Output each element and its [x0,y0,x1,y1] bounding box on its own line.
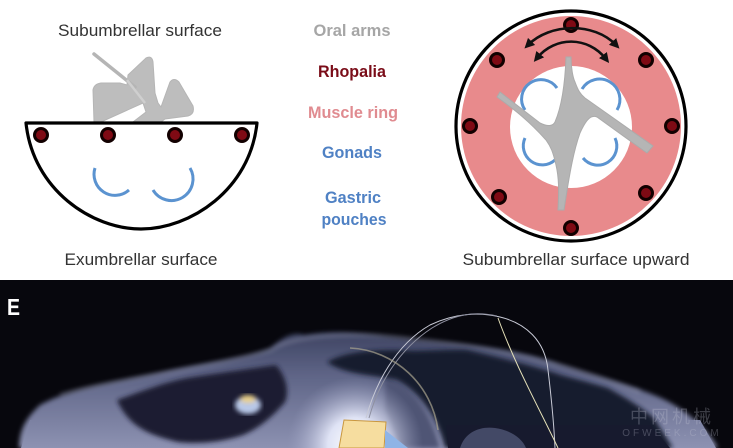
legend: gastric pouches: Gastric [325,188,381,207]
rhopalia [34,128,248,142]
umbrella outline [26,123,257,229]
side-view jellyfish diagram [26,54,257,229]
watermark: OFWEEK.COM [622,428,722,439]
cloudy tissue [460,428,526,448]
central glow [287,377,423,448]
legend: gastric pouches second line: pouches [322,210,386,229]
rhopalia ring [464,18,678,234]
blue reflection [385,430,408,448]
jellyfish bell [19,332,718,448]
photo panel [0,280,733,448]
left dark cavity [117,365,287,443]
left caption: Exumbrellar surface [64,250,218,269]
bell rim highlight [60,335,640,395]
central opening [510,66,632,188]
gastric pouches [522,79,620,165]
oral arms [93,54,193,122]
legend: rhopalia: Rhopalia [318,62,387,81]
muscle ring [461,16,681,236]
gonads [94,168,193,201]
watermark [622,407,722,439]
legend: gonads: Gonads [322,143,382,162]
contraction arrows [528,28,616,59]
bell lower fill [21,420,716,448]
photo background [0,280,733,448]
right cavity lower fill [446,425,670,448]
legend: oral arms: Oral arms [314,21,390,40]
oral arms star [497,57,653,210]
bright organ [235,395,261,414]
watermark: 中网机械 [630,407,714,427]
legend [308,21,398,229]
legend: muscle ring: Muscle ring [308,103,398,122]
right dark cavity [327,350,673,448]
central mid-tone region [385,375,440,448]
panel letter: E [7,294,20,320]
tether device [339,420,386,448]
right caption: Subumbrellar surface upward [462,250,690,269]
outer ring [456,11,686,241]
wires [350,314,558,448]
left heading: Subumbrellar surface [58,21,222,40]
top-view jellyfish diagram [456,11,686,241]
